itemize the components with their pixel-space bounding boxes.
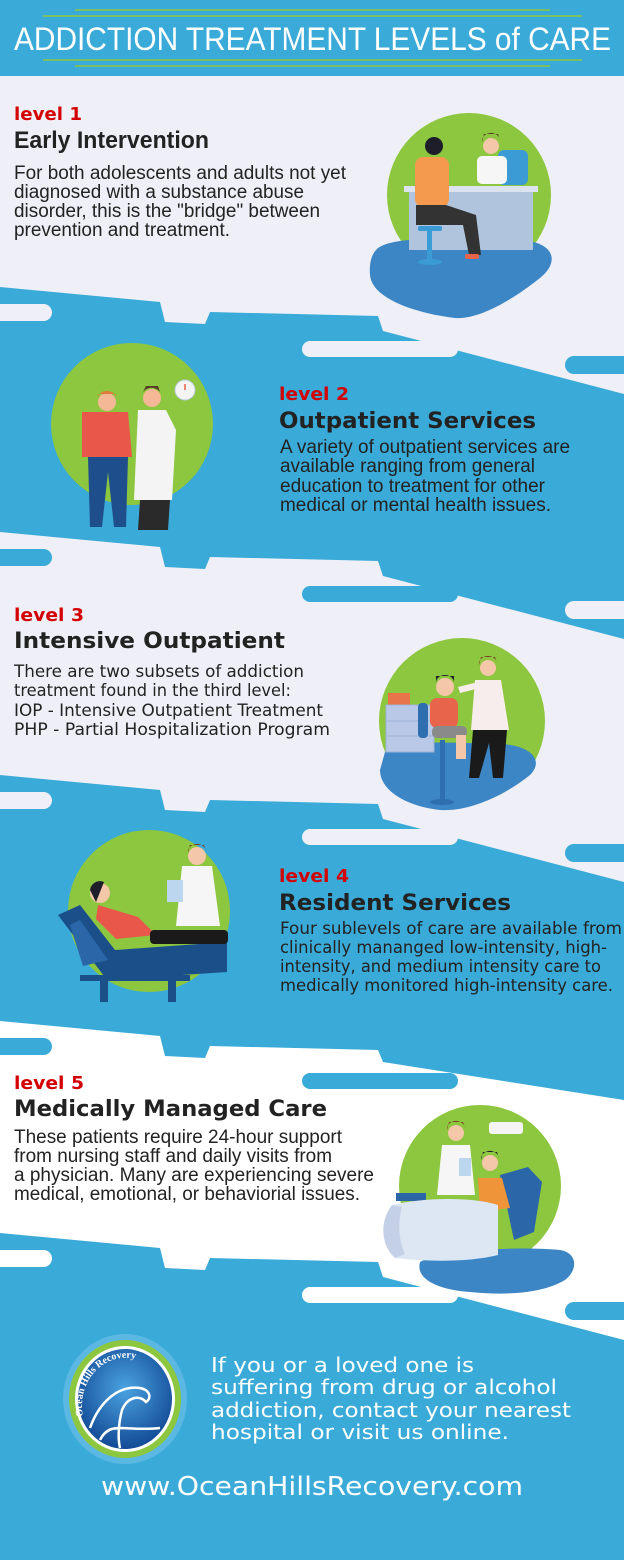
level 3 text block: PHP - Partial Hospitalization Program [14, 720, 330, 740]
level 3 text block [13, 605, 330, 740]
logo: Ocean Hills Recovery: Ocean Hills Recovery [76, 1353, 136, 1416]
level 5 text block [14, 1073, 374, 1205]
level 2 text block: medical or mental health issues. [280, 495, 551, 516]
level 1 text block: For both adolescents and adults not yet [14, 163, 347, 184]
level 2 text block: education to treatment for other [280, 476, 546, 497]
illustration 4: patient reclining, doctor with clipboard [58, 830, 230, 1002]
illustration 3: doctor examining seated patient [379, 638, 545, 810]
level 2 text block [279, 384, 570, 516]
band 3 background [0, 1021, 624, 1340]
level 2 text block: level 2 [279, 384, 349, 405]
illustration 2: patient and doctor standing [51, 343, 213, 530]
level 5 text block: level 5 [14, 1073, 84, 1094]
level 5 text block: medical, emotional, or behaviorial issues. [14, 1184, 360, 1205]
level 1 text block: Early Intervention [14, 127, 209, 154]
call to action text: suffering from drug or alcohol [211, 1375, 557, 1399]
level 1 text block [14, 104, 347, 241]
level 3 text block: Intensive Outpatient [14, 629, 286, 654]
level 1 text block: disorder, this is the "bridge" between [14, 201, 320, 222]
call to action text: hospital or visit us online. [211, 1420, 509, 1444]
level 3 text block: treatment found in the third level: [14, 681, 291, 701]
level 2 text block: A variety of outpatient services are [280, 437, 570, 458]
level 4 text block: intensity, and medium intensity care to [280, 957, 601, 977]
level 1 text block: diagnosed with a substance abuse [14, 182, 304, 203]
call to action text [211, 1353, 571, 1444]
illustration 1: consultation at desk [370, 113, 552, 318]
band 1 background [0, 76, 624, 394]
header [0, 0, 624, 76]
level 3 text block: There are two subsets of addiction [13, 662, 304, 682]
call to action text: addiction, contact your nearest [211, 1398, 571, 1422]
level 4 text block [279, 866, 622, 996]
level 5 text block: Medically Managed Care [14, 1097, 327, 1122]
level 3 text block: level 3 [14, 605, 84, 626]
level 1 text block: level 1 [14, 104, 82, 125]
level 4 text block: medically monitored high-intensity care. [280, 976, 613, 996]
call to action text: If you or a loved one is [211, 1353, 474, 1377]
level 5 text block: a physician. Many are experiencing severe [14, 1165, 374, 1186]
band 2 background [0, 532, 624, 882]
level 1 text block: prevention and treatment. [14, 220, 230, 241]
illustration 5: patient in hospital bed [383, 1105, 574, 1294]
level 2 text block: available ranging from general [280, 456, 535, 477]
level 5 text block: from nursing staff and daily visits from [14, 1146, 332, 1167]
level 4 text block: clinically mananged low-intensity, high- [280, 938, 607, 958]
level 4 text block: Four sublevels of care are available from [280, 919, 622, 939]
level 5 text block: These patients require 24-hour support [14, 1127, 343, 1148]
level 2 text block: Outpatient Services [279, 409, 536, 434]
level 4 text block: level 4 [279, 866, 349, 887]
logo: Ocean Hills Recovery [63, 1334, 187, 1464]
level 4 text block: Resident Services [279, 891, 511, 916]
level 3 text block: IOP - Intensive Outpatient Treatment [14, 701, 323, 721]
website URL: www.OceanHillsRecovery.com [101, 1472, 523, 1502]
